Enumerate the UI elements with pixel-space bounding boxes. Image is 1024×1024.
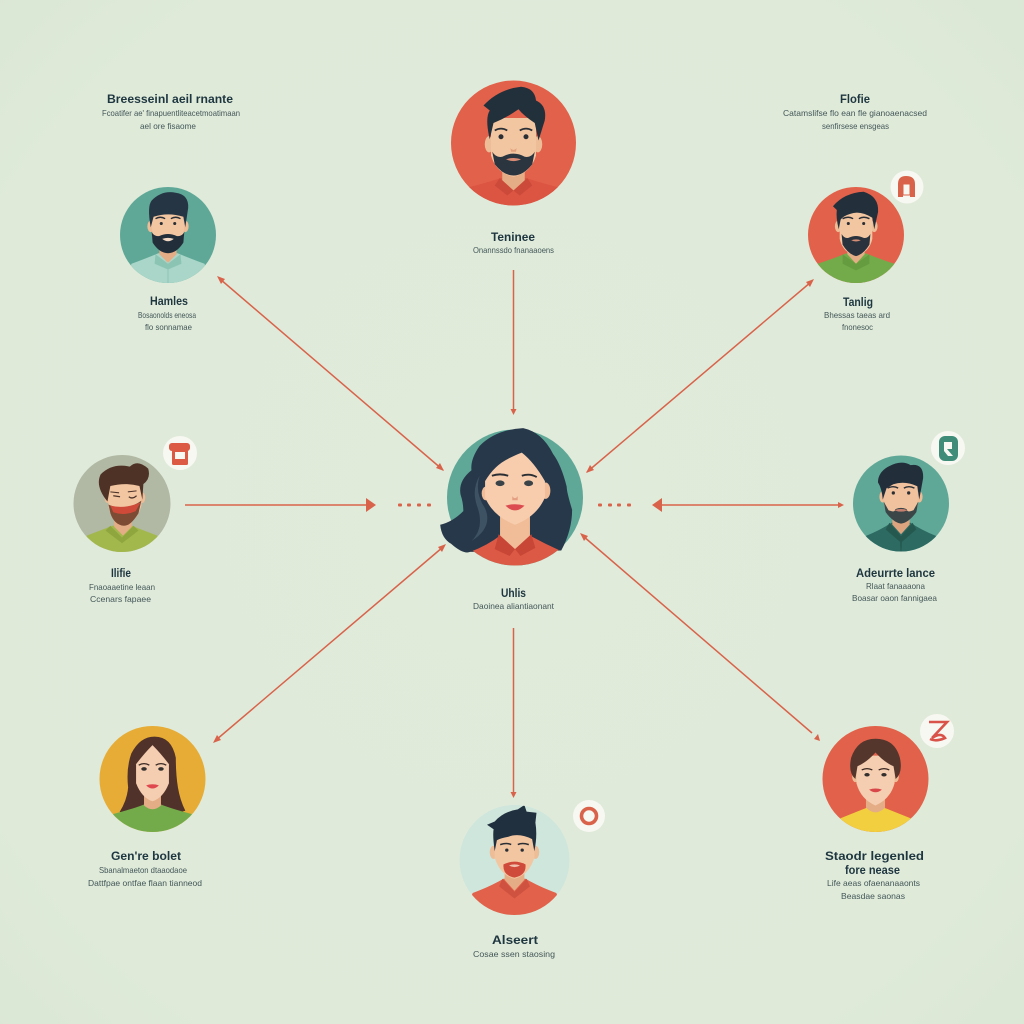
arrow: right link: [652, 498, 844, 512]
dots: left: [398, 504, 431, 506]
text block: top person: Onannssdo fnanaaoens: [473, 245, 554, 255]
text block: bottom-right person: Staodr legenled: [825, 849, 924, 863]
text block: top-right person: Bhessas taeas ard: [824, 310, 890, 320]
text block: top-left heading: [102, 92, 240, 131]
text block: bottom-right person: fore nease: [845, 863, 900, 877]
badge: left: [163, 436, 197, 470]
avatar: top-left man: [120, 187, 216, 293]
arrow: bottom-left link: [213, 544, 446, 743]
badge: bottom: [573, 800, 605, 832]
text block: top-left heading: Fcoatifer ae' finapuentliteacetmoatimaan: [102, 108, 240, 118]
text block: bottom-left person: Sbanalmaeton dtaaodaoe: [99, 865, 187, 875]
avatar: top-right man: [808, 187, 904, 293]
text block: bottom person: Cosae ssen staosing: [473, 949, 555, 959]
text block: bottom-left person: Dattfpae ontfae flaan tianneod: [88, 878, 202, 888]
avatar: bottom-right woman: [822, 726, 928, 843]
text block: bottom-left person: [88, 849, 202, 888]
text block: right person: Boasar oaon fannigaea: [852, 593, 937, 603]
text block: center person: [473, 586, 555, 611]
arrow: bottom-right link: [580, 533, 820, 741]
badge: bottom-right: [920, 714, 954, 748]
avatar: left man: [74, 455, 170, 562]
avatar: bottom man: [460, 805, 570, 926]
text block: right person: [852, 566, 937, 603]
badge: right: [931, 431, 965, 465]
text block: top-left person: flo sonnamae: [145, 322, 192, 332]
text block: bottom-right person: Beasdae saonas: [841, 891, 905, 901]
text block: top-left person: Hamles: [150, 294, 188, 308]
text block: left person: Ilifie: [111, 566, 131, 580]
arrow: center to bottom: [510, 628, 516, 798]
text block: left person: Fnaoaaetine leaan: [89, 582, 155, 592]
text block: top-right person: Tanlig: [843, 295, 873, 309]
text block: left person: [89, 566, 155, 604]
text block: bottom-right person: [825, 849, 924, 901]
avatar: right man: [853, 456, 949, 561]
text block: top-right heading: senfirsese ensgeas: [822, 121, 889, 131]
text block: left person: Ccenars fapaee: [90, 594, 151, 604]
text block: bottom person: Alseert: [492, 933, 538, 947]
text block: top person: [473, 230, 554, 255]
text block: bottom-right person: Life aeas ofaenanaaonts: [827, 878, 920, 888]
text block: right person: Rlaat fanaaaona: [866, 581, 925, 591]
text block: center person: Uhlis: [501, 586, 526, 600]
text block: top-left heading: Breesseinl aeil rnante: [107, 92, 233, 106]
text block: top-right person: [824, 295, 890, 332]
arrow: top-right link: [586, 279, 814, 473]
text block: top-right heading: Catamslifse flo ean fle gianoaenacsed: [783, 108, 927, 118]
text block: top-left person: Bosaonolds eneosa: [138, 310, 196, 320]
text block: top-right heading: Flofie: [840, 92, 870, 106]
text block: bottom-left person: Gen're bolet: [111, 849, 181, 863]
text block: center person: Daoinea aliantiaonant: [473, 601, 555, 611]
text block: top person: Teninee: [491, 230, 535, 244]
dots: right: [598, 504, 631, 506]
text block: top-left heading: ael ore fisaome: [140, 121, 196, 131]
arrow: top to center: [510, 270, 516, 415]
avatar: top man: [451, 80, 576, 218]
avatar: bottom-left woman: [100, 726, 206, 843]
text block: bottom person: [473, 933, 555, 959]
arrow: left to center: [185, 498, 376, 512]
avatar: center woman: [440, 428, 583, 579]
text block: top-right heading: [783, 92, 927, 131]
text block: top-right person: fnonesoc: [842, 322, 874, 332]
text block: top-left person: [138, 294, 196, 332]
badge: top-right: [890, 170, 924, 204]
arrow: top-left link: [217, 276, 444, 471]
text block: right person: Adeurrte lance: [856, 566, 935, 580]
